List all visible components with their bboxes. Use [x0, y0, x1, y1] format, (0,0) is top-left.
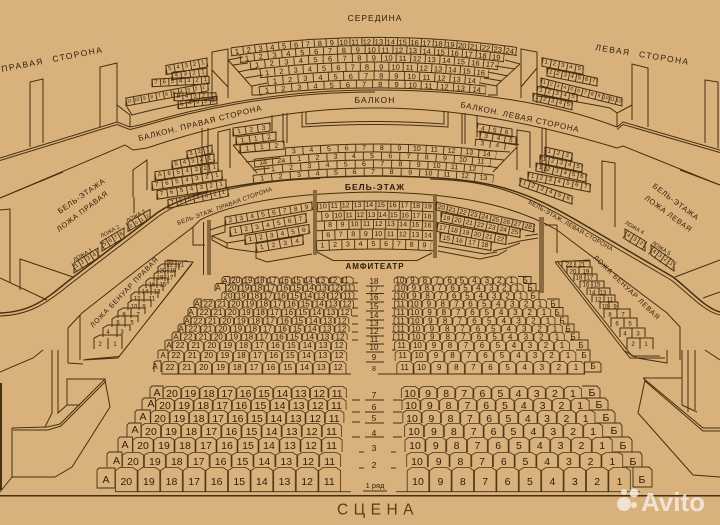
- mezzanine row 1: 10 11 12 13 14: [413, 146, 490, 156]
- seat numbers: А: [188, 308, 194, 317]
- box 5: [648, 240, 677, 272]
- panel: benoir box right: 2: [98, 342, 102, 348]
- panel: balcony right side seats: 9 8 7 6 5 4 3 2 1: [143, 86, 205, 100]
- panel: amphitheatre right wing seats: 1 2 3 4 5 6 7: [233, 215, 303, 235]
- panel: mezzanine middle seats: [232, 122, 519, 183]
- seat numbers: А: [131, 424, 139, 436]
- panel: benoir box left: 4: [623, 332, 627, 338]
- panel: benoir box left: 2: [631, 342, 635, 348]
- seat numbers: 9 8 7 6 5 4 3 2 1: [412, 284, 520, 292]
- seat numbers: 11 10: [397, 308, 420, 317]
- seat numbers: 11 10: [398, 341, 422, 350]
- seat numbers: Б: [565, 324, 571, 334]
- panel: benoir box left: 15: [594, 282, 601, 288]
- mezzanine stepped blocks right: 4 5 6: [481, 126, 508, 134]
- row 4 of balcony middle: 1 2 3 4 5 6 7 8 9: [266, 64, 383, 76]
- row numbers upper block: [352, 277, 396, 374]
- seat numbers: 9 8 7 6 5 4 3 2 1: [430, 332, 560, 342]
- seats outlines: [378, 276, 601, 374]
- panel: amphitheatre left wing seats: 19 20 21 22 23 24 25: [442, 214, 519, 236]
- panel: balcony left side seats: 10 11 12: [603, 95, 622, 103]
- box 5: ЛОЖА 5: [650, 240, 671, 257]
- row numbers upper block: 16: [370, 293, 379, 302]
- panel: amphitheatre right wing seats: [210, 201, 314, 262]
- panel: mezzanine right side seats: 7 6 5 4 3 2 1: [170, 190, 226, 206]
- watermark logo: Avito: [641, 487, 705, 517]
- panel: amphitheatre right wing seats: 1 2 3 4: [259, 237, 300, 251]
- panel: mezzanine right side seats: 7 6 5 4 3 2 1: [160, 182, 224, 197]
- mezzanine stepped blocks left: [232, 122, 284, 174]
- seat numbers: Б: [550, 300, 556, 308]
- panel: amphitheatre left wing seats: 20 21 22 23 24 25 26 27 28: [437, 203, 533, 231]
- row numbers upper block: 17: [370, 284, 379, 294]
- seat numbers: 22 21 20 19 18 17 16 15 14 13 12: [184, 332, 345, 342]
- row numbers lower block: 3: [372, 443, 377, 453]
- seat numbers: 10: [411, 456, 423, 468]
- seat numbers: 20 19 18 17 16 15 14 13 12 11: [166, 388, 343, 400]
- row numbers lower block: 4: [372, 428, 377, 438]
- panel: amphitheatre middle seats: 9: [325, 213, 329, 220]
- row boundaries and stairs: [228, 37, 520, 95]
- panel: mezzanine left side seats: [518, 146, 592, 205]
- panel: amphitheatre middle seats: 10 11 12 13 14: [374, 231, 432, 239]
- panel: benoir box left: 17: [587, 276, 594, 282]
- balcony label: БАЛКОН: [354, 95, 396, 105]
- box 4: [622, 220, 648, 252]
- seat numbers: Б: [530, 292, 536, 300]
- pillars and balcony structure: [30, 49, 718, 148]
- mezzanine row 2: 1а 2а: [260, 158, 286, 165]
- row numbers upper block: 8: [372, 366, 376, 373]
- row numbers lower block: 1 ряд: [366, 481, 385, 490]
- row numbers upper block: 18: [370, 277, 379, 286]
- row 3 of balcony middle: [250, 54, 499, 69]
- seats outlines: [396, 386, 652, 492]
- mezzanine row 4: 1 2 3 4 5 6 7 8 9: [260, 169, 412, 180]
- panel: benoir box left: 3: [636, 332, 640, 338]
- panel: amphitheatre left wing seats: [435, 201, 538, 260]
- seat numbers: А: [147, 398, 155, 410]
- panel: benoir box right: 6: [116, 320, 120, 326]
- row numbers lower block: 6: [372, 402, 377, 412]
- panel: benoir box left: 9: [613, 304, 617, 310]
- row numbers upper block: 14: [370, 311, 379, 320]
- seat numbers: Б: [630, 456, 637, 468]
- mezzanine row 3: [264, 160, 483, 174]
- panel: stalls lower right side block: [97, 386, 351, 492]
- seat numbers: 9 8 7 6 5 4 3 2 1: [431, 426, 596, 438]
- panel: benoir box left: 19: [583, 270, 590, 276]
- panel: benoir box right: [83, 260, 193, 360]
- panel: mezzanine right side seats: 7 6 5 4 3 2 1: [155, 173, 220, 188]
- seat numbers: Б: [581, 351, 587, 360]
- seat numbers: 20 19 18 17 16 15 14 13 12 11: [137, 440, 337, 452]
- panel: amphitheatre middle seats: 10 11 12 13 14 15 16: [351, 220, 432, 229]
- row 5 of balcony middle: 1 2 3 4 5 6 7 8 9: [273, 73, 398, 84]
- panel: amphitheatre left wing seats: 17 18 19 20 21 22: [439, 224, 505, 243]
- panel: benoir box left: 11: [607, 298, 614, 304]
- seat numbers: А: [139, 411, 147, 423]
- panel: balcony left side seats: [532, 57, 622, 110]
- heading: left side: ЛЕВАЯ СТОРОНА: [595, 42, 690, 67]
- seat numbers: Б: [603, 412, 610, 424]
- panel: balcony right side seats: 7 6 5 4 3 2 1: [154, 77, 207, 84]
- mezzanine stepped blocks left: 1 2 3: [238, 125, 266, 134]
- panel: balcony right side seats: [125, 57, 218, 110]
- box right label: ЛОЖА ПРАВАЯ: [55, 189, 110, 234]
- panel: benoir box left: 18: [576, 276, 583, 282]
- panel: mezzanine right side seats: 3 2 1: [189, 147, 211, 157]
- mezzanine front band: [0, 170, 720, 360]
- panel: balcony left side seats: 1 2 3 4 5 6 7: [549, 70, 596, 82]
- seat numbers: 22 21 20 19 18 17 16 15 14 13 12: [176, 341, 344, 350]
- seat numbers: А: [194, 300, 200, 308]
- row numbers upper block: 11: [370, 335, 379, 344]
- panel: benoir box right: 18: [157, 276, 164, 282]
- box 3: ЛОЖА 3: [126, 209, 147, 225]
- seat numbers: А: [178, 324, 184, 334]
- panel: mezzanine left side seats: 1 2 3 4 5 6 7: [530, 174, 588, 190]
- panel: balcony right side seats: 4 3 2 1: [174, 69, 204, 76]
- seat numbers: 9 8 7 6 5 4 3 2 1: [437, 476, 623, 488]
- row numbers lower block: 2: [372, 460, 377, 470]
- panel: benoir box left: 7: [621, 312, 625, 318]
- seat numbers: 10: [412, 476, 424, 488]
- mezzanine row 3: 1 2 3 4 5 6 7 8 9: [272, 161, 420, 172]
- mezzanine row 3: 10 11 12: [433, 162, 476, 172]
- box 4: ЛОЖА 4: [624, 220, 645, 236]
- row 1 of balcony middle: 10 11 12 13 14 15 16 17 18 19 20 21 22 23 24: [340, 39, 514, 54]
- panel: mezzanine right side seats: 5 4 3 2 1: [174, 155, 213, 168]
- row numbers upper block: 12: [370, 327, 379, 336]
- panel: benoir box right: 3: [120, 330, 124, 336]
- panel: benoir box right: 9: [142, 304, 146, 310]
- box 2: [100, 224, 124, 252]
- seat numbers: А: [102, 474, 110, 486]
- mezzanine stepped blocks left: 1 1 2: [246, 143, 278, 150]
- mezzanine row 1: 3 4 5 6 7 8 9: [292, 145, 401, 154]
- seat numbers: 22 21 20 19 18 17 16 15 14 13 12: [194, 316, 347, 326]
- left lower corner stairs and walls: [0, 350, 110, 492]
- seat numbers: 11 10: [397, 300, 419, 308]
- seat numbers: 11 10: [401, 363, 427, 372]
- panel: benoir box right: 21: [178, 262, 185, 268]
- panel: benoir box left: 8: [608, 312, 612, 318]
- mezzanine structure: columns and box under balcony: [133, 112, 615, 227]
- seat numbers: 20 19 18 17 16 15 14 13 12 11: [120, 476, 335, 488]
- mezzanine boxes left label: БЕЛЬ-ЭТАЖА: [651, 181, 701, 222]
- seat numbers: 22 21 20 19 18 17 16 15 14 13 12: [204, 300, 352, 308]
- mezzanine stepped blocks left: 1 1 2: [241, 134, 271, 142]
- seat numbers: 9 8 7 6 5 4 3 2 1: [428, 413, 589, 425]
- mezzanine row 4: 10 11 12 13: [425, 170, 487, 180]
- panel: benoir box right: 15: [160, 282, 167, 288]
- row 5 of balcony middle: [267, 72, 481, 86]
- panel: mezzanine right side seats: А 6 5 4 3 2 1: [157, 164, 217, 179]
- panel: balcony left side seats: 1 2 3 4 5: [540, 88, 574, 98]
- panel: mezzanine left side seats: 1 2 3: [547, 149, 570, 159]
- panel: amphitheatre left wing seats: 15 16 17 18: [442, 234, 489, 249]
- panel: balcony left side seats: 1 2 3 4 5: [536, 94, 570, 106]
- panel: benoir box left: 14: [589, 290, 596, 296]
- seats outlines: [97, 386, 351, 492]
- seat numbers: 22 21 20 19 18 17 16 15 14 13 12: [200, 308, 350, 317]
- seat numbers: 11 10: [399, 351, 424, 360]
- amphitheatre label: АМФИТЕАТР: [346, 262, 404, 271]
- panel: mezzanine left side seats: 1 2 3 4 5 6: [538, 165, 585, 180]
- seat numbers: Б: [559, 316, 565, 326]
- seat numbers: А: [166, 341, 172, 350]
- panel: benoir box left: 20: [570, 270, 577, 276]
- seat numbers: Б: [578, 341, 584, 350]
- seat numbers: А: [222, 276, 228, 285]
- row 1 of balcony middle: [230, 38, 518, 56]
- seat numbers: [404, 387, 646, 488]
- mezzanine label: БЕЛЬ-ЭТАЖ: [345, 182, 405, 192]
- row 4 of balcony middle: [260, 62, 490, 78]
- heading: middle section: СЕРЕДИНА: [348, 13, 402, 23]
- stage label: СЦЕНА: [337, 502, 419, 518]
- box 1: [71, 247, 101, 274]
- seat numbers: А: [121, 439, 129, 451]
- seat numbers: Б: [554, 308, 560, 317]
- panel: benoir box left: 12: [595, 298, 602, 304]
- seat numbers: 9 8 7 6 5 4 3 2 1: [430, 324, 558, 334]
- seat numbers: А: [160, 351, 166, 360]
- seat numbers: 20 19 18 17 16 15 14 13 12 11: [224, 292, 352, 300]
- panel: amphitheatre middle seats: 1 2 3 4 5 6 7 8 9: [320, 240, 427, 249]
- seat numbers: 10: [405, 400, 417, 412]
- seat numbers: 9 8 7 6 5 4 3 2 1: [436, 456, 615, 468]
- row 2 of balcony middle: 10 11 12 13 14 15 16 17 18 19: [368, 47, 500, 60]
- row 2 of balcony middle: 1 2 3 4 5 6 7 8 9: [245, 47, 360, 61]
- seat numbers: 9 8 7 6 5 4 3 2 1: [412, 292, 523, 300]
- seat numbers: 9 8 7 6 5 4 3 2 1: [427, 308, 547, 317]
- seats outlines: [154, 276, 355, 374]
- panel: benoir box left: 10: [602, 304, 609, 310]
- heading: right side: ПРАВАЯ СТОРОНА: [0, 44, 104, 74]
- seat numbers: 20 19 18 17 16 15 14 13 12 11: [159, 400, 342, 412]
- panel: benoir box left: 6: [615, 322, 619, 328]
- seat numbers: Б: [639, 474, 646, 486]
- seat numbers: 20 19 18 17 16 15 14 13 12 11: [154, 413, 340, 425]
- seat numbers: 20 19 18 17 16 15 14 13 12 11: [145, 426, 337, 438]
- seat numbers: 10: [397, 284, 406, 292]
- row 6 of balcony middle: [258, 80, 486, 94]
- panel: amphitheatre middle seats: 8 9: [328, 221, 345, 229]
- panel: benoir box right: 14: [142, 290, 149, 296]
- mezzanine row boundaries: [253, 144, 496, 175]
- box 3: [126, 208, 150, 232]
- seat numbers: 9 8 7 6 5 4 3 2 1: [437, 363, 579, 372]
- panel: benoir box right: 12: [134, 296, 141, 302]
- panel: benoir box right: 19: [170, 268, 177, 274]
- panel: benoir box right: 8: [122, 312, 126, 318]
- panel: amphitheatre middle seats: 10 11 12 13 14 15 16 17 18: [334, 211, 432, 220]
- row numbers upper block: 15: [370, 302, 379, 311]
- seat numbers: 20 19 18 17 16 15 14 13 12 11: [127, 456, 335, 468]
- columns around amphitheatre: [204, 190, 544, 293]
- seat numbers: 10: [408, 426, 420, 438]
- seat numbers: А: [152, 362, 158, 371]
- seat numbers: 9 8 7 6 5 4 3 2 1: [410, 276, 514, 285]
- seat numbers: Б: [620, 440, 627, 452]
- row numbers upper block: 13: [370, 319, 379, 328]
- right lower corner stairs and walls: [623, 350, 720, 477]
- seat numbers: [102, 387, 343, 488]
- mezzanine row 4: [252, 168, 494, 183]
- seat numbers: А: [215, 284, 221, 292]
- seat numbers: 10: [409, 440, 421, 452]
- mezzanine row 1: [284, 144, 497, 159]
- seat numbers: 9 8 7 6 5 4 3 2 1: [434, 351, 571, 360]
- seat numbers: 9 8 7 6 5 4 3 2 1: [433, 440, 605, 452]
- box 1: 1 2 3 4: [74, 252, 97, 269]
- panel: amphitheatre middle seats: [316, 200, 434, 261]
- row numbers lower block: 5: [372, 413, 377, 423]
- box left label: ЛОЖА ЛЕВАЯ: [643, 193, 694, 234]
- panel: benoir box right: 20: [160, 268, 167, 274]
- panel: benoir box right: 1: [113, 342, 117, 348]
- seat numbers: 22 21 20 19 18 17 16 15 14 13 12: [189, 324, 347, 334]
- seat numbers: 10: [396, 276, 405, 285]
- benoir box right label: ЛОЖА БЕНУАР ПРАВАЯ: [89, 256, 160, 329]
- box 3: 9 0 1 2: [128, 213, 150, 228]
- panel: balcony left side seats: 1 2 3 4 5 6 7 8 9: [543, 80, 600, 98]
- panel: benoir box right: 5: [130, 320, 134, 326]
- row numbers lower block: [352, 390, 402, 491]
- box 2: ЛОЖА 2: [100, 224, 121, 240]
- row numbers upper block: 9: [372, 353, 377, 362]
- seat numbers: 20 19 18 17 16 15 14 13 12 11: [232, 276, 349, 285]
- seat numbers: 11 10: [397, 324, 421, 334]
- panel: amphitheatre right wing seats: 2 3 4 5 6 7 8 9: [228, 203, 309, 224]
- panel: stalls lower left side block: [396, 386, 652, 492]
- panel: mezzanine left side seats: 1 2 3 4 5 6: [522, 180, 571, 202]
- seat numbers: 22 21 20 19 18 17 16 15 14 13 12: [172, 351, 344, 360]
- panel: benoir box left: 21: [579, 262, 586, 268]
- row 6 of balcony middle: 10 11 12 13 14: [408, 82, 481, 92]
- mezzanine left side label: БЕЛЬ-ЭТАЖ, ЛЕВАЯ СТОРОНА: [527, 200, 614, 253]
- seat numbers: Б: [611, 425, 618, 437]
- seat numbers: 9 8 7 6 5 4 3 2 1: [427, 300, 543, 308]
- balcony right side label: БАЛКОН. ПРАВАЯ СТОРОНА: [137, 103, 263, 143]
- panel: benoir box left: [555, 260, 665, 358]
- panel: balcony right side seats: 5 4 3 2 1: [180, 97, 216, 106]
- balcony front band: [0, 90, 720, 198]
- mezzanine stepped blocks right: 3 4 5: [484, 134, 512, 142]
- panel: benoir box right: 4: [106, 330, 110, 336]
- row 5 of balcony middle: 10 11 12 13 14: [408, 74, 476, 84]
- seat numbers: [396, 276, 596, 372]
- row numbers upper block: 10: [370, 343, 379, 352]
- panel: balcony right side seats: 5 4 3 2 1: [168, 60, 204, 70]
- seat numbers: Б: [527, 284, 533, 292]
- panel: benoir box left: 1: [644, 342, 648, 348]
- row 2 of balcony middle: [240, 46, 504, 62]
- seat numbers: Б: [570, 332, 576, 342]
- panel: stalls upper right side block: [152, 276, 355, 374]
- panel: balcony right side seats: 5 4 3 2 1: [176, 93, 214, 98]
- seat numbers: 9 8 7 6 5 4 3 2 1: [428, 316, 551, 326]
- panel: benoir box left: 5: [628, 322, 632, 328]
- seat numbers: 11 10: [397, 316, 420, 326]
- row 4 of balcony middle: 10 11 12 13 14 15 16: [392, 64, 485, 76]
- mezzanine right side label: БЕЛЬ-ЭТАЖ. ПРАВАЯ СТОРОНА: [177, 187, 273, 227]
- mezzanine stepped blocks right: 3 4: [480, 140, 499, 148]
- seat numbers: 9 8 7 6 5 4 3 2 1: [427, 400, 583, 412]
- mezzanine row 2: 1 2 3 4 5 6 7 8 9: [298, 153, 447, 161]
- mezzanine stepped blocks right: [474, 123, 519, 172]
- seat numbers: 10: [406, 413, 418, 425]
- mezzanine row 2: 10 11: [459, 156, 484, 164]
- panel: benoir box right: 22: [167, 262, 174, 268]
- panel: mezzanine left side seats: 1 2 3 4 5: [542, 157, 581, 170]
- seat numbers: А: [184, 316, 190, 326]
- panel: benoir box left: 13: [600, 290, 607, 296]
- seat numbers: 10: [404, 388, 416, 400]
- panel: benoir box right: 16: [149, 282, 156, 288]
- panel: benoir box right: 17: [167, 276, 174, 282]
- panel: mezzanine boxes: [71, 208, 677, 274]
- row 3 of balcony middle: 1 2 3 4 5 6 7 8 9: [256, 55, 376, 68]
- seat numbers: [152, 276, 353, 372]
- seat numbers: 9 8 7 6 5 4 3 2 1: [425, 388, 576, 400]
- seat numbers: 9 8 7 6 5 4 3 2 1: [432, 341, 565, 350]
- box 2: 5 6 7 8: [102, 231, 125, 248]
- panel: benoir box left: 22: [566, 262, 573, 268]
- panel: balcony right side seats: 11 10: [127, 97, 140, 103]
- panel: amphitheatre middle seats: 10 11 12 13 14 15 16 17 18 19: [319, 202, 432, 210]
- panel: stalls upper left side block: [378, 276, 601, 374]
- seat numbers: А: [173, 332, 179, 342]
- stage front line: [0, 495, 720, 497]
- panel: benoir box right: 10: [131, 304, 138, 310]
- seat numbers: А: [153, 387, 161, 399]
- seat numbers: Б: [589, 387, 596, 399]
- panel: benoir box left: 16: [583, 282, 590, 288]
- box 5: 4 3 2 1: [651, 249, 674, 267]
- seat numbers: А: [113, 455, 120, 467]
- row 1 of balcony middle: 1 2 3 4 5 6 7 8 9: [235, 40, 334, 54]
- panel: balcony left side seats: 1 2 3 4 5: [544, 60, 581, 70]
- box 4: 4 3 2: [625, 233, 644, 247]
- seat numbers: 22 21 20 19 18 17 16 15 14 13 12: [166, 363, 343, 372]
- panel: benoir box right: 11: [149, 296, 156, 302]
- mezzanine row 2: [254, 152, 491, 167]
- seat numbers: Б: [522, 276, 528, 285]
- mezzanine boxes right label: БЕЛЬ-ЭТАЖА: [56, 176, 107, 216]
- seat numbers: Б: [590, 362, 596, 371]
- panel: mezzanine right side seats: [151, 144, 230, 209]
- balcony left side label: БАЛКОН. ЛЕВАЯ СТОРОНА: [460, 100, 580, 134]
- row 3 of balcony middle: 10 11 12 13 14 15 16 17: [384, 55, 494, 68]
- panel: amphitheatre right wing seats: 1 2 3 4 5 6: [248, 226, 307, 243]
- benoir box left label: ЛОЖА БЕНУАР ЛЕВАЯ: [592, 254, 661, 322]
- seat numbers: Б: [596, 399, 603, 411]
- seat numbers: 10: [397, 292, 406, 300]
- panel: amphitheatre middle seats: 6 7 8 9: [326, 231, 368, 239]
- row 6 of balcony middle: 1 2 3 4 5 6 7 8 9: [266, 82, 398, 93]
- seat numbers: 11 10: [397, 332, 421, 342]
- seat numbers: 20 19 18 17 16 15 14 13 12 11: [228, 284, 353, 292]
- panel: balcony middle seats: [228, 36, 520, 96]
- panel: benoir box right: 13: [154, 290, 161, 296]
- box 1: ЛОЖА 1: [72, 248, 94, 264]
- row numbers lower block: 7: [372, 390, 377, 400]
- panel: benoir box right: 7: [136, 312, 140, 318]
